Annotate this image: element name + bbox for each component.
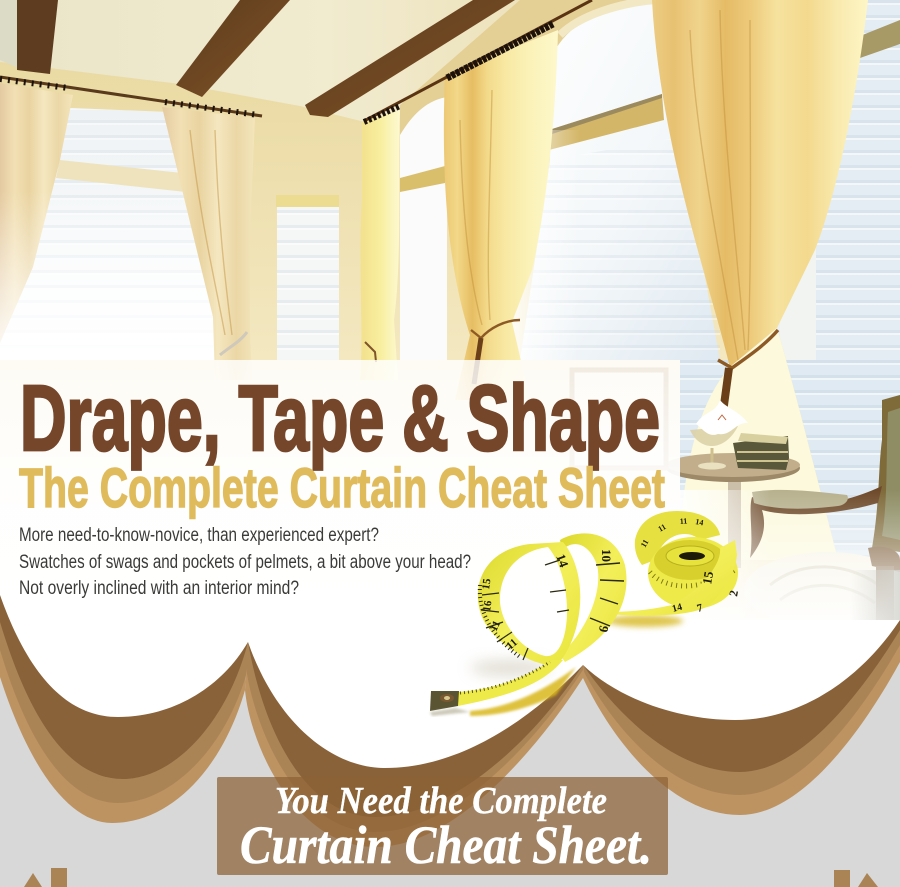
white fade over left window	[0, 206, 214, 348]
swag: right	[583, 620, 900, 815]
icon: bottom right	[834, 870, 878, 887]
tape coil: 11	[679, 516, 688, 526]
curtain rod right	[364, 0, 592, 122]
call-to-action label: Curtain Cheat Sheet.	[240, 815, 652, 875]
grey corner of photo	[861, 570, 900, 620]
photo: room with curtains	[0, 0, 900, 628]
call-to-action label	[217, 777, 668, 875]
tape metal tip	[430, 691, 470, 716]
tape coil: 11	[656, 522, 668, 534]
tape numbers: 16	[481, 599, 495, 612]
tape coil	[610, 511, 741, 616]
tape back band	[560, 533, 627, 662]
curtain: far left	[0, 83, 73, 343]
icon: bottom left	[24, 868, 67, 887]
tape coil: 15	[699, 570, 716, 586]
tape front loop	[478, 542, 580, 665]
intro text	[19, 525, 471, 599]
tape coil: 2	[726, 589, 741, 598]
side table with books and flower	[680, 400, 800, 568]
tape shadows	[470, 615, 683, 716]
tape coil: 14	[695, 517, 704, 527]
tape coil: 7	[696, 602, 705, 615]
intro text: Swatches of swags and pockets of pelmets, a bit above your head?	[19, 552, 471, 573]
white scalloped area	[0, 590, 900, 768]
tape numbers: 14	[553, 552, 572, 570]
tape back band: 9	[596, 624, 612, 634]
intro text: Not overly inclined with an interior mind?	[19, 578, 299, 599]
tape numbers: 11	[504, 636, 520, 652]
tape numbers	[480, 552, 572, 660]
white haze on centre window	[512, 130, 576, 358]
swag: left	[0, 590, 248, 823]
tiebacks	[219, 318, 780, 407]
curtain rod left	[0, 77, 262, 116]
tape numbers: 11	[488, 619, 503, 633]
armchair	[744, 395, 900, 628]
left fade of photo	[680, 490, 766, 568]
curtain: left window	[162, 107, 255, 380]
curtain: narrow centre	[360, 110, 400, 380]
bottom fade of photo	[693, 496, 900, 620]
call-to-action label: You Need the Complete	[275, 780, 607, 822]
tape tail	[457, 660, 563, 706]
tape numbers: 15	[480, 577, 494, 590]
white panel behind title	[0, 360, 680, 620]
curtain: right large	[652, 0, 868, 560]
tape coil: 11	[639, 538, 651, 549]
intro text: More need-to-know-novice, than experienced expert?	[19, 525, 379, 546]
curtain: right lower flare	[680, 328, 838, 560]
icon: measuring tape	[430, 511, 741, 716]
tape coil: 14	[671, 602, 683, 615]
swag: centre	[245, 642, 583, 847]
faint chair behind title	[572, 370, 666, 468]
curtain: centre large	[444, 30, 558, 400]
tape back band: 10	[599, 549, 614, 562]
